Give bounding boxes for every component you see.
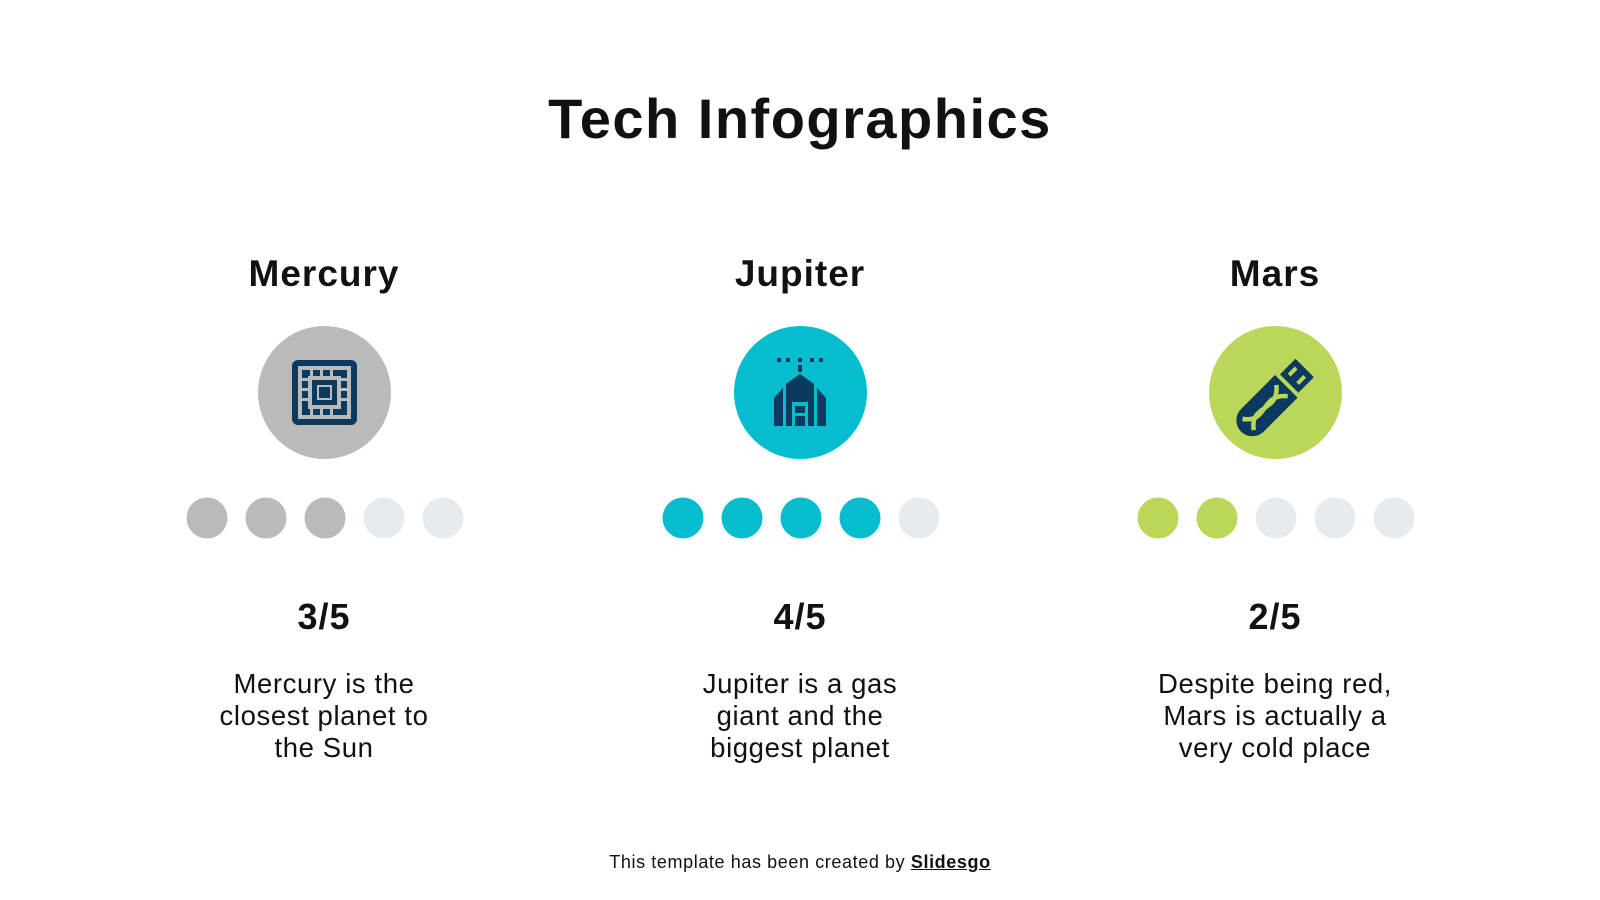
icon: usb dna [1209, 326, 1342, 459]
description: Mercury is the [233, 668, 415, 699]
description: the Sun [274, 732, 374, 763]
description [1158, 668, 1392, 763]
rating dots: 3/5 [186, 498, 464, 538]
rating dots: 4/5 [662, 498, 940, 538]
heading: jupiter: Jupiter [735, 253, 865, 294]
description: very cold place [1179, 732, 1371, 763]
title: Tech Infographics [548, 87, 1052, 150]
description [703, 668, 897, 763]
description: Jupiter is a gas [703, 668, 897, 699]
score: 2/5 [1248, 596, 1302, 637]
panel: jupiter [662, 253, 940, 763]
score: 4/5 [773, 596, 827, 637]
panel: mercury [186, 253, 464, 763]
heading: mars: Mars [1230, 253, 1320, 294]
icon: chip [258, 326, 391, 459]
panel: mars [1138, 253, 1414, 763]
heading: mercury: Mercury [249, 253, 399, 294]
description: Mars is actually a [1163, 700, 1387, 731]
icon: building [734, 326, 867, 459]
rating dots: 2/5 [1138, 498, 1414, 538]
footer credit: This template has been created by Slidesgo [609, 852, 991, 872]
description [220, 668, 428, 763]
description: giant and the [717, 700, 883, 731]
description: closest planet to [220, 700, 428, 731]
description: biggest planet [710, 732, 890, 763]
score: 3/5 [297, 596, 351, 637]
description: Despite being red, [1158, 668, 1392, 699]
